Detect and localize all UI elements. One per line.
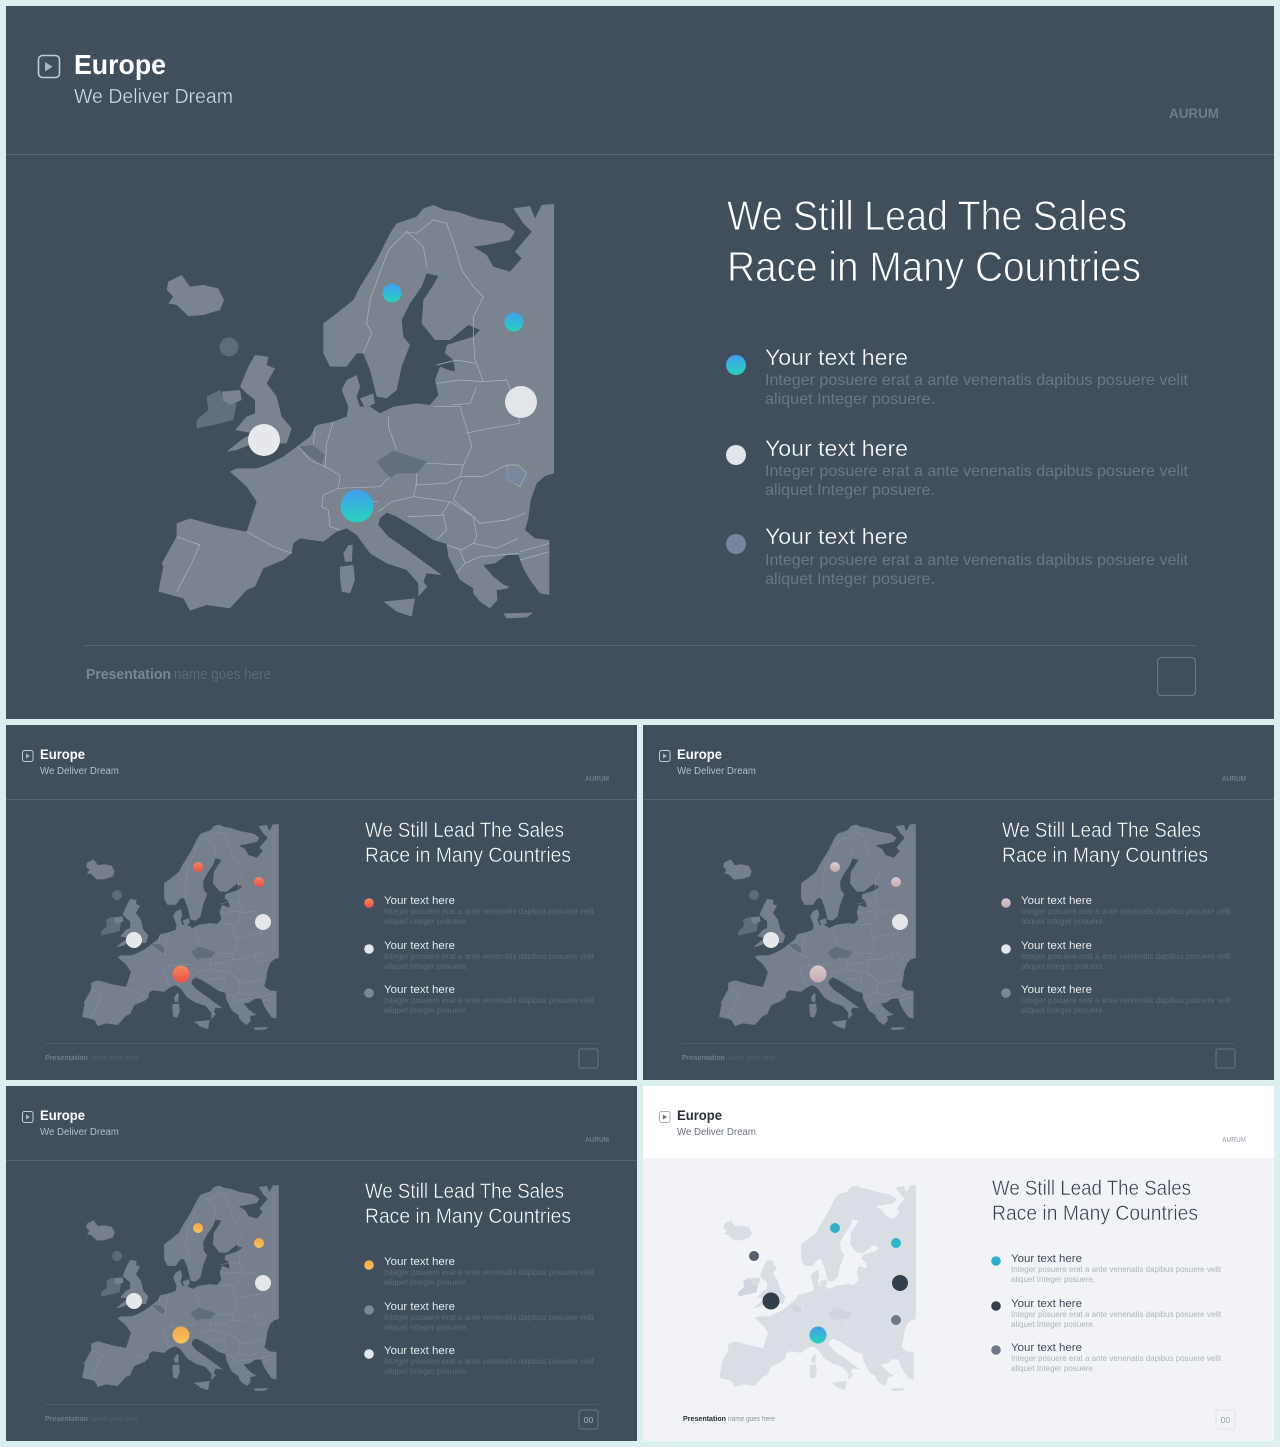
subheading: We Deliver Dream — [677, 766, 756, 777]
legend item 2: Your text here — [384, 1301, 455, 1313]
legend item 1: Your text here — [765, 345, 908, 370]
icon: play button — [22, 1112, 33, 1122]
heading: Europe: Europe — [40, 746, 85, 762]
legend item 1: Your text here — [384, 1256, 455, 1268]
heading: Europe: Europe — [74, 49, 166, 80]
panel: pink variant — [643, 725, 1274, 1080]
subheading: We Deliver Dream — [40, 1127, 119, 1138]
icon: play button — [22, 750, 33, 762]
brand: AURUM: AURUM — [585, 1137, 609, 1144]
legend item 1: Integer posuere erat a ante venenatis dapibus posuere velit — [765, 372, 1189, 389]
footer text: Presentation — [45, 1414, 88, 1423]
map: Europe — [158, 204, 554, 618]
icon: play button — [38, 56, 60, 78]
legend item 3: Integer posuere erat a ante venenatis dapibus posuere velit — [1011, 1354, 1222, 1363]
footer text — [682, 1053, 775, 1062]
title: Race in Many Countries — [727, 243, 1141, 290]
footer text — [683, 1414, 775, 1423]
page number box — [1158, 658, 1196, 696]
subheading: We Deliver Dream — [677, 1127, 756, 1138]
map markers — [749, 862, 908, 982]
panel: orange variant — [6, 1086, 637, 1441]
map markers — [220, 284, 537, 522]
legend item 3: aliquet Integer posuere. — [384, 1006, 468, 1015]
legend item 3 — [726, 524, 1189, 588]
heading: Europe: Europe — [677, 746, 722, 762]
legend item 1: aliquet Integer posuere. — [1021, 917, 1105, 926]
footer text: name goes here — [91, 1414, 138, 1423]
title — [727, 192, 1141, 290]
legend item 1 — [1001, 895, 1232, 926]
footer text: Presentation — [45, 1053, 88, 1062]
legend item 2 — [364, 1301, 595, 1332]
footer text: Presentation — [683, 1414, 726, 1423]
footer text: name goes here — [91, 1053, 138, 1062]
legend item 1 — [364, 1256, 595, 1287]
title: We Still Lead The Sales — [992, 1177, 1191, 1200]
map markers — [749, 1223, 908, 1344]
title: Race in Many Countries — [365, 844, 571, 867]
legend item 2: Integer posuere erat a ante venenatis dapibus posuere velit — [1011, 1310, 1222, 1319]
title — [992, 1177, 1198, 1225]
legend item 3 — [364, 1345, 595, 1376]
legend item 1 — [364, 895, 595, 926]
legend item 1 — [726, 345, 1189, 408]
legend item 2: Integer posuere erat a ante venenatis dapibus posuere velit — [1021, 952, 1232, 961]
legend item 2 — [991, 1298, 1222, 1329]
legend item 3: Your text here — [1021, 984, 1092, 996]
legend item 1: aliquet Integer posuere. — [384, 917, 468, 926]
title: We Still Lead The Sales — [365, 1180, 564, 1203]
legend item 3: aliquet Integer posuere. — [1011, 1364, 1095, 1373]
subheading: We Deliver Dream — [74, 86, 233, 108]
icon: play button — [660, 750, 670, 762]
page number box — [1216, 1049, 1235, 1068]
panel: red variant — [6, 725, 637, 1080]
legend item 1: Integer posuere erat a ante venenatis dapibus posuere velit — [1021, 907, 1232, 916]
page number box: 00 — [584, 1415, 593, 1425]
map markers — [112, 1223, 271, 1344]
legend item 2: aliquet Integer posuere. — [384, 1323, 468, 1332]
map: Europe — [82, 824, 279, 1030]
legend item 1: Your text here — [1011, 1253, 1082, 1265]
legend item 2 — [364, 940, 595, 971]
legend item 2 — [1001, 940, 1232, 971]
footer text — [86, 667, 271, 683]
legend item 3 — [991, 1342, 1222, 1373]
legend item 3: Integer posuere erat a ante venenatis dapibus posuere velit — [384, 996, 595, 1005]
map: Europe — [719, 824, 916, 1030]
page number box: 00 — [1221, 1415, 1230, 1425]
legend item 2: Your text here — [765, 436, 908, 461]
legend item 3: Your text here — [384, 1345, 455, 1357]
page number box — [579, 1049, 598, 1068]
legend item 1: aliquet Integer posuere. — [384, 1278, 468, 1287]
legend item 2 — [726, 436, 1189, 499]
legend item 2: Integer posuere erat a ante venenatis dapibus posuere velit — [384, 1313, 595, 1322]
page number box — [1216, 1410, 1235, 1429]
legend item 1 — [991, 1253, 1222, 1284]
legend item 2: Integer posuere erat a ante venenatis dapibus posuere velit — [384, 952, 595, 961]
title: We Still Lead The Sales — [365, 819, 564, 842]
legend item 2: aliquet Integer posuere. — [384, 962, 468, 971]
legend item 1: Your text here — [384, 895, 455, 907]
title: We Still Lead The Sales — [1002, 819, 1201, 842]
legend item 3: aliquet Integer posuere. — [1021, 1006, 1105, 1015]
panel: light variant — [643, 1086, 1274, 1441]
legend item 3: Your text here — [765, 524, 908, 549]
legend item 2: Your text here — [384, 940, 455, 952]
title — [365, 819, 571, 867]
legend item 2: aliquet Integer posuere. — [765, 482, 935, 499]
icon: play button — [660, 1112, 670, 1122]
legend item 1: Integer posuere erat a ante venenatis dapibus posuere velit — [1011, 1265, 1222, 1274]
map markers — [112, 862, 271, 982]
panel: main slide — [6, 6, 1274, 719]
title: Race in Many Countries — [992, 1202, 1198, 1225]
title — [1002, 819, 1208, 867]
legend item 3: Your text here — [384, 984, 455, 996]
title: We Still Lead The Sales — [727, 192, 1127, 239]
legend item 3: Your text here — [1011, 1342, 1082, 1354]
brand: AURUM: AURUM — [1222, 776, 1246, 783]
legend item 2: Integer posuere erat a ante venenatis dapibus posuere velit — [765, 463, 1189, 480]
footer text: Presentation — [86, 667, 171, 683]
title: Race in Many Countries — [365, 1205, 571, 1228]
footer text: Presentation — [682, 1053, 725, 1062]
legend item 3: Integer posuere erat a ante venenatis dapibus posuere velit — [384, 1357, 595, 1366]
legend item 1: aliquet Integer posuere. — [765, 391, 935, 408]
subheading: We Deliver Dream — [40, 766, 119, 777]
legend item 2: Your text here — [1011, 1298, 1082, 1310]
legend item 3: Integer posuere erat a ante venenatis dapibus posuere velit — [1021, 996, 1232, 1005]
legend item 3: aliquet Integer posuere. — [765, 571, 935, 588]
legend item 1: Integer posuere erat a ante venenatis dapibus posuere velit — [384, 907, 595, 916]
legend item 1: aliquet Integer posuere. — [1011, 1275, 1095, 1284]
legend item 3 — [364, 984, 595, 1015]
footer text: name goes here — [728, 1053, 775, 1062]
title — [365, 1180, 571, 1228]
title: Race in Many Countries — [1002, 844, 1208, 867]
footer text — [45, 1053, 138, 1062]
heading: Europe: Europe — [677, 1107, 722, 1123]
legend item 3: aliquet Integer posuere. — [384, 1367, 468, 1376]
brand: AURUM: AURUM — [1169, 105, 1219, 121]
legend item 3 — [1001, 984, 1232, 1015]
legend item 3: Integer posuere erat a ante venenatis dapibus posuere velit — [765, 552, 1189, 569]
legend item 1: Your text here — [1021, 895, 1092, 907]
footer text: name goes here — [728, 1414, 775, 1423]
legend item 2: aliquet Integer posuere. — [1021, 962, 1105, 971]
heading: Europe: Europe — [40, 1107, 85, 1123]
brand: AURUM: AURUM — [1222, 1137, 1246, 1144]
map: Europe — [82, 1185, 279, 1391]
page number box — [579, 1410, 598, 1429]
map: Europe — [719, 1185, 916, 1391]
legend item 2: aliquet Integer posuere. — [1011, 1320, 1095, 1329]
legend item 1: Integer posuere erat a ante venenatis dapibus posuere velit — [384, 1268, 595, 1277]
footer text — [45, 1414, 138, 1423]
brand: AURUM: AURUM — [585, 776, 609, 783]
footer text: name goes here — [174, 667, 271, 683]
legend item 2: Your text here — [1021, 940, 1092, 952]
